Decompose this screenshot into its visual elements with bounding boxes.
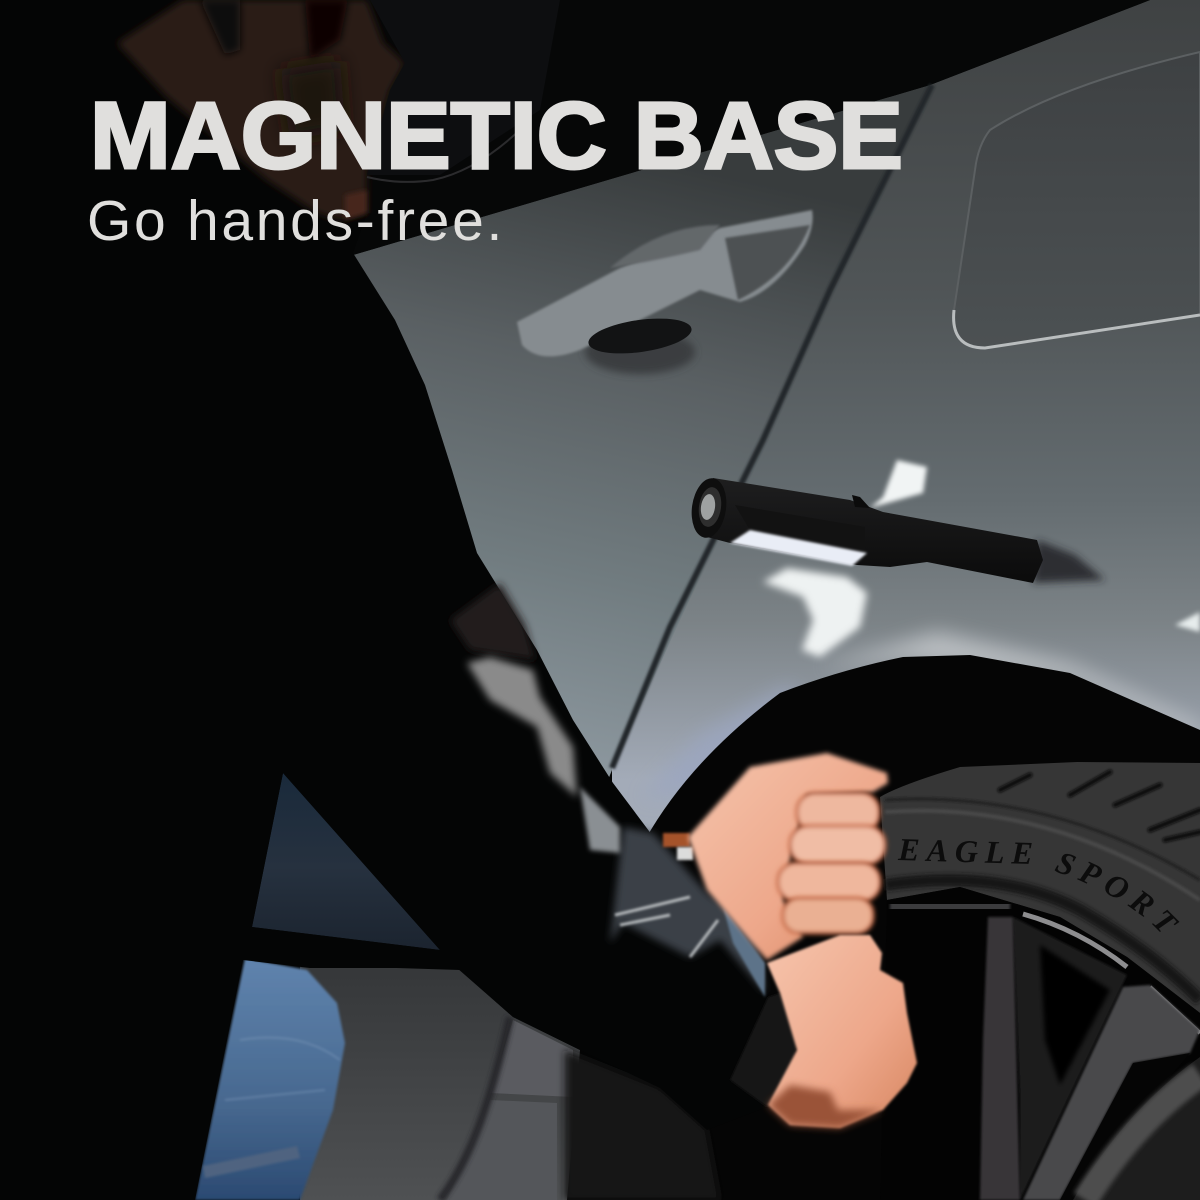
face in shadow: [117, 0, 405, 220]
tyre: [880, 762, 1200, 1013]
sleeve highlights: [450, 583, 765, 997]
tool handle behind hand: [663, 833, 693, 860]
magnetic work light: [688, 476, 1105, 583]
lower door sill: [300, 965, 720, 1200]
jeans: [195, 958, 345, 1200]
lower hand gripping: [767, 935, 917, 1128]
shirt under arm: [252, 773, 440, 950]
alloy wheel: [880, 887, 1200, 1200]
fuel door outline: [954, 52, 1200, 348]
upper hand gripping: [688, 753, 888, 960]
door seam line: [612, 85, 932, 768]
cuff: [730, 993, 797, 1107]
title: MAGNETIC BASE: [90, 83, 903, 189]
reflection highlights on car: [640, 460, 1200, 800]
dark window area at top of car: [330, 0, 1150, 255]
door handle: [517, 210, 813, 374]
subtitle: Go hands-free.: [87, 189, 505, 253]
cap brim: [367, 0, 560, 182]
car rear quarter panel: [612, 0, 1200, 880]
wheel arch: [645, 655, 1200, 1200]
tyre brand lettering: EAGLE SPORT: [898, 839, 1180, 932]
car door panel: [353, 85, 930, 800]
foreground tyre edge: [1073, 1057, 1200, 1200]
person silhouette: torso and sleeve: [0, 0, 797, 1200]
